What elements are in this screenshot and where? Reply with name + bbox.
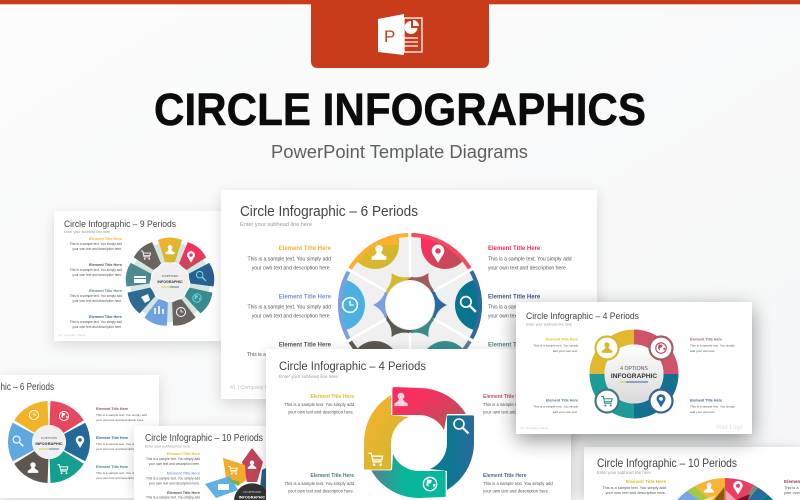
subhead: centre 4 periods: Enter your subhead line here — [279, 374, 338, 379]
text blocks: 9 periods: your own text and description here. — [72, 299, 122, 303]
text blocks right: centre: your own text and description here. — [483, 410, 549, 414]
text blocks: 10 periods left: your own text and description here. — [149, 482, 200, 486]
text blocks: small 6 periods: This is a sample text. You simply add — [96, 442, 147, 446]
badge: person — [596, 336, 618, 360]
text block left: 10 periods right: your own text and description here. — [605, 490, 666, 495]
text blocks left: centre: your own text and description here. — [288, 410, 354, 414]
text blocks: 9 periods: your own text and description here. — [72, 273, 122, 277]
text blocks left: 6 periods — [247, 246, 332, 358]
text blocks: right 4 periods: This is a sample text. You simply — [533, 344, 578, 348]
icon: PowerPoint logo: P — [384, 27, 395, 46]
text blocks: 10 periods left: This is a sample text. You simply add — [146, 496, 200, 500]
text blocks left: centre: This is a sample text. You simply add — [284, 481, 355, 486]
text blocks right: 6 periods: Element Title Here — [488, 342, 541, 348]
title: CIRCLE INFOGRAPHICS — [154, 84, 646, 135]
text blocks: 9 periods: This is a sample text. You simply add — [70, 268, 122, 272]
subhead: 10 periods right: Enter your subhead line here — [597, 470, 651, 475]
header: top bar and PowerPoint tab — [0, 0, 800, 68]
text blocks: small 6 periods: your own text and description here. — [96, 418, 144, 422]
chart: six segment circle — [338, 233, 482, 349]
text blocks left: 6 periods: Element Title Here — [279, 294, 332, 300]
text blocks left: 6 periods: Element Title Here — [279, 342, 332, 348]
text blocks left: 6 periods: This is a sample text. You simply add — [247, 256, 331, 262]
icon: pin wedge — [733, 481, 743, 495]
text blocks: right 4 periods: Element Title Here — [546, 398, 578, 402]
text blocks: 10 periods left: This is a sample text. You simply add — [146, 476, 200, 480]
text blocks: small 6 periods: Element Title Here — [96, 436, 128, 440]
text blocks left: centre: Element Title Here — [310, 394, 354, 400]
subhead: 10 periods left: Enter your subhead line here — [145, 444, 190, 448]
text block left: 10 periods right — [602, 479, 666, 495]
text blocks left: 6 periods: Element Title Here — [279, 246, 332, 252]
text blocks right: centre: Element Title Here — [483, 394, 527, 400]
chart: four option ring: INFOGRAPHIC — [611, 373, 657, 380]
text blocks: right 4 periods: Element Title Here — [546, 338, 578, 342]
text blocks: 10 periods left: your own text and description here. — [149, 462, 200, 466]
text blocks: small 6 periods: your own text and description here. — [96, 447, 144, 451]
heading: centre 4 periods: Circle Infographic – 4 Periods — [279, 359, 426, 373]
text blocks right: 6 periods: This is a sample text. You simply add — [488, 256, 572, 262]
text block right: 10 periods right — [784, 479, 800, 495]
text block right: 10 periods right: your own — [784, 490, 800, 495]
panel: slide 10 periods left — [134, 426, 274, 500]
text blocks left: 6 periods: This is a sample text. — [247, 352, 295, 358]
text blocks: 9 periods: Element Title Here — [89, 237, 122, 241]
footer: 9 periods: 41 | Company Name — [58, 333, 86, 337]
chart: four option ring: 4 OPTIONS — [620, 366, 648, 372]
footer: right 4 periods: 41 | Company Name — [520, 426, 549, 430]
text blocks left: 6 periods: your own text and description here. — [252, 314, 331, 320]
text blocks left: centre: Element Title Here — [310, 473, 354, 479]
text blocks right: centre: Element Title Here — [483, 473, 527, 479]
chart: six segment ring: 6 OPTIONS — [41, 436, 57, 440]
subhead: 9 periods: Enter your subhead line here — [64, 230, 110, 234]
subhead: 6 periods: Enter your subhead line here — [240, 222, 312, 228]
heading: 9 periods: Circle Infographic – 9 Periods — [64, 218, 176, 229]
text block right: 10 periods right: This is a — [784, 485, 799, 490]
chart: ten wedge circle — [677, 478, 773, 500]
chart: ten petal circle — [205, 448, 266, 500]
text blocks right: centre — [483, 394, 553, 494]
text blocks left: centre: your own text and description here. — [288, 488, 354, 494]
text blocks: 10 periods left: This is a sample text. You simply add — [146, 457, 200, 461]
chart: interlocking four part ring — [364, 387, 474, 498]
text blocks: right 4 periods: add your own text. — [553, 410, 578, 414]
text blocks: 9 periods: your own text and description here. — [72, 247, 122, 251]
text blocks: 10 periods left: Element Title Here — [167, 472, 200, 476]
text blocks: small 6 periods: Element Title Here — [96, 465, 128, 469]
heading: 10 periods left: Circle Infographic – 10 Periods — [145, 433, 263, 444]
text blocks: small 6 periods: your own text and description here. — [96, 476, 144, 480]
text blocks left: 6 periods: your own text and description here. — [252, 266, 331, 272]
text blocks right: 6 periods: This is a sample text. You simply add — [488, 304, 572, 310]
chart: nine petal circle — [124, 238, 216, 328]
text blocks right: 6 periods: your own text and description here. — [488, 266, 567, 272]
text blocks: small 6 periods: This is a sample text. You simply add — [96, 471, 147, 475]
text blocks: 9 periods: This is a sample text. You simply add — [70, 320, 122, 324]
icon: globe ring — [423, 477, 437, 491]
icon: search ring — [454, 419, 468, 434]
panel: slide 6 periods small — [0, 375, 159, 500]
text blocks: small 6 periods: This is a sample text. You simply add — [96, 413, 147, 417]
chart: ten petal circle: INFOGRAPHIC — [239, 496, 266, 500]
chart: six segment ring — [9, 402, 89, 482]
text blocks: right 4 periods — [533, 338, 735, 414]
panel: slide 4 periods centre — [266, 349, 571, 500]
text blocks right: 6 periods: Element Title Here — [488, 246, 541, 252]
text blocks: right 4 periods: Element Title Here — [690, 398, 722, 402]
chart: four option ring — [596, 336, 672, 412]
text blocks: 9 periods: your own text and description here. — [72, 325, 122, 329]
text blocks: right 4 periods: This is a sample text. You simply — [533, 404, 578, 408]
icon: person wedge — [704, 483, 714, 493]
panel: slide 9 periods — [54, 211, 226, 345]
panel: slide 10 periods right — [584, 447, 800, 500]
text blocks: 9 periods: This is a sample text. You simply add — [70, 294, 122, 298]
chart: nine petal circle: INFOGRAPHIC — [157, 280, 183, 284]
text blocks: right 4 periods: This is a sample text. You simply — [690, 344, 735, 348]
text blocks: small 6 periods: Element Title Here — [96, 407, 128, 411]
text blocks right: centre: This is a sample text. You simply add — [483, 481, 553, 486]
text blocks: right 4 periods: add your own text. — [690, 410, 715, 414]
text block left: 10 periods right: Element Title Here — [626, 479, 666, 484]
text blocks right: 6 periods: your own text and description here. — [488, 314, 567, 320]
footer: 6 periods: 41 | Company Name — [230, 385, 279, 391]
text blocks right: 6 periods: Element Title Here — [488, 294, 541, 300]
chart: ten petal circle: 10 OPTIONS — [243, 490, 261, 494]
text blocks: 10 periods left: Element Title Here — [167, 452, 200, 456]
logo placeholder: Your Logo — [716, 425, 744, 431]
panel: slide 4 periods right — [516, 302, 752, 440]
icon: clock — [343, 298, 357, 312]
text blocks: 10 periods left: Element Title Here — [167, 491, 200, 495]
text blocks: 9 periods: Element Title Here — [89, 315, 122, 319]
badge: globe — [650, 336, 672, 360]
icon: pin — [432, 245, 444, 263]
text blocks left: centre — [284, 394, 355, 494]
icon: person — [372, 245, 386, 260]
text blocks: 9 periods — [70, 237, 122, 329]
red tab — [311, 0, 489, 68]
text blocks right: centre: your own text and description here. — [483, 488, 549, 494]
text blocks: 9 periods: Element Title Here — [89, 289, 122, 293]
text blocks: right 4 periods: add your own text. — [553, 349, 578, 353]
text blocks left: 6 periods: This is a sample text. You simply add — [247, 304, 331, 310]
text blocks: small 6 periods — [96, 407, 147, 480]
text blocks right: centre: This is a sample text. You simply add — [483, 402, 553, 407]
badge: cart — [596, 390, 618, 412]
chart: nine petal circle: 9 OPTIONS — [162, 274, 178, 278]
text blocks right: 6 periods — [488, 246, 572, 348]
subtitle: PowerPoint Template Diagrams — [271, 141, 528, 162]
text blocks: right 4 periods: This is a sample text. You simply — [690, 404, 735, 408]
text blocks: 10 periods left — [146, 452, 200, 500]
chart: six segment ring: INFOGRAPHIC — [35, 441, 63, 446]
icon: cart ring — [368, 453, 383, 466]
heading: right 4 periods: Circle Infographic – 4 Periods — [526, 311, 639, 322]
text blocks left: centre: This is a sample text. You simply add — [284, 402, 355, 407]
text blocks: 9 periods: This is a sample text. You simply add — [70, 242, 122, 246]
badge: pin — [650, 390, 672, 412]
heading: 6 periods: Circle Infographic – 6 Periods — [240, 204, 418, 220]
heading: 10 periods right: Circle Infographic – 10 Periods — [597, 457, 737, 470]
text blocks: right 4 periods: Element Title Here — [690, 338, 722, 342]
text block left: 10 periods right: This is a sample text. You simply add — [602, 485, 666, 490]
icon: PowerPoint logo — [378, 14, 422, 55]
text blocks: right 4 periods: add your own text. — [690, 349, 715, 353]
subhead: right 4 periods: Enter your subhead line here — [526, 322, 572, 326]
icon: search — [461, 297, 476, 312]
icon: person ring — [394, 393, 408, 406]
text blocks: 9 periods: Element Title Here — [89, 263, 122, 267]
panel: slide 6 periods large — [221, 190, 597, 403]
